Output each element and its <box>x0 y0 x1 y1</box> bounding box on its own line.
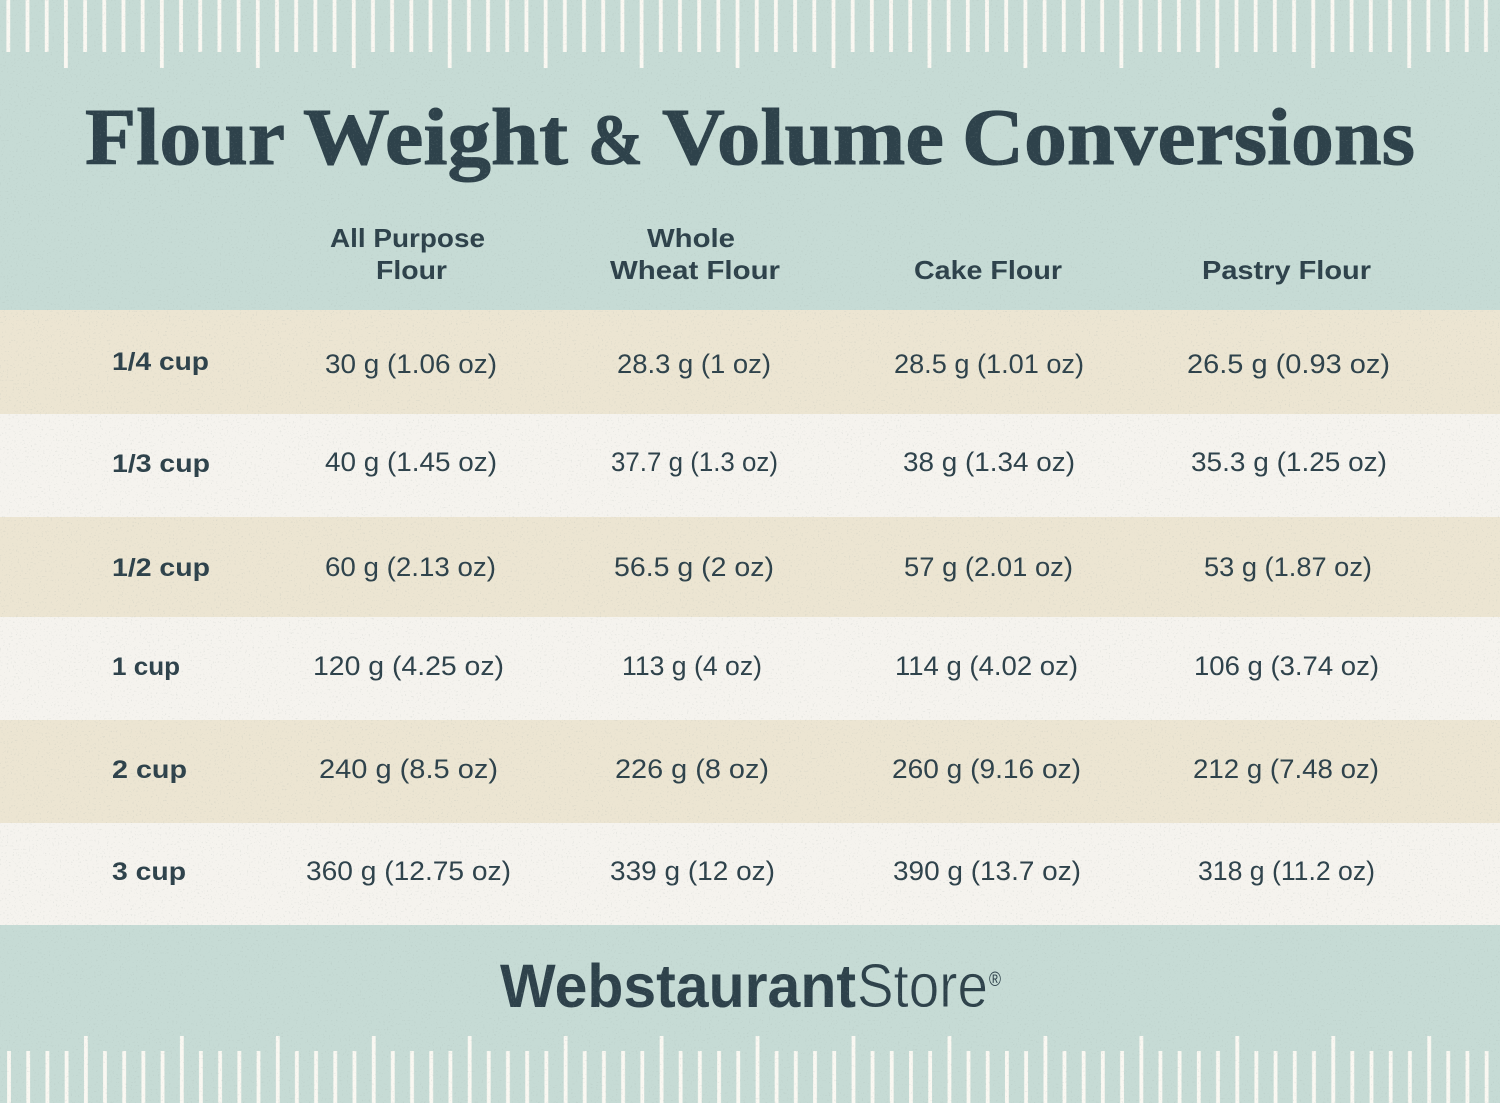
row: 1/3 cup: 1/3 cup <box>112 450 210 478</box>
row: 1/3 cup: 40 g (1.45 oz) <box>325 447 497 477</box>
row: 1/4 cup: 1/4 cup <box>112 348 209 376</box>
heading: Pastry Flour: Pastry Flour <box>1202 255 1371 285</box>
row: 1/4 cup: 28.5 g (1.01 oz) <box>894 349 1084 379</box>
row: 3 cup: 339 g (12 oz) <box>610 856 775 886</box>
column headings <box>330 223 1371 285</box>
row: 2 cup: 260 g (9.16 oz) <box>892 754 1081 784</box>
row: 2 cup: 212 g (7.48 oz) <box>1193 754 1379 784</box>
logo: WebstaurantStore: Webstaurant <box>500 952 856 1020</box>
row: 1/3 cup: 37.7 g (1.3 oz) <box>611 447 778 477</box>
row: 3 cup: 318 g (11.2 oz) <box>1198 856 1375 886</box>
row: 1 cup: 113 g (4 oz) <box>622 651 762 681</box>
heading: Cake Flour: Cake Flour <box>914 255 1062 285</box>
row: 1/4 cup <box>0 310 1500 414</box>
row: 1/3 cup <box>0 414 1500 517</box>
row: 3 cup: 390 g (13.7 oz) <box>893 856 1081 886</box>
row: 1 cup: 120 g (4.25 oz) <box>313 651 504 681</box>
row: 1/3 cup: 38 g (1.34 oz) <box>903 447 1075 477</box>
logo: WebstaurantStore: Store <box>857 952 988 1021</box>
heading: Whole Wheat Flour: Whole <box>647 223 735 253</box>
ruler ticks: bottom <box>0 1036 1500 1103</box>
row: 2 cup <box>0 720 1500 823</box>
row: 1/2 cup: 53 g (1.87 oz) <box>1204 552 1372 582</box>
heading: All Purpose Flour: Flour <box>376 255 447 285</box>
ruler ticks: top <box>0 0 1500 70</box>
title: Conversions <box>962 92 1415 182</box>
row: 1/2 cup: 56.5 g (2 oz) <box>614 552 774 582</box>
title <box>85 92 1415 182</box>
row: 1/4 cup: 30 g (1.06 oz) <box>325 349 497 379</box>
row: 1 cup: 106 g (3.74 oz) <box>1194 651 1379 681</box>
title: & <box>588 100 643 180</box>
row: 3 cup: 3 cup <box>112 858 186 886</box>
row: 1/2 cup: 60 g (2.13 oz) <box>325 552 496 582</box>
row: 1/2 cup: 1/2 cup <box>112 554 210 582</box>
title: Volume <box>662 92 944 182</box>
logo: WebstaurantStore: ® <box>989 969 1001 991</box>
title: Flour <box>85 92 285 182</box>
row: 3 cup: 360 g (12.75 oz) <box>306 856 511 886</box>
row: 1/2 cup <box>0 517 1500 617</box>
row: 1 cup: 1 cup <box>112 653 180 681</box>
row: 2 cup: 240 g (8.5 oz) <box>319 754 498 784</box>
row: 1 cup: 114 g (4.02 oz) <box>895 651 1078 681</box>
title: Weight <box>303 92 568 182</box>
heading: All Purpose Flour <box>330 223 485 285</box>
heading: All Purpose Flour: All Purpose <box>330 223 485 253</box>
row: 1/2 cup: 57 g (2.01 oz) <box>904 552 1073 582</box>
row: 3 cup <box>0 823 1500 925</box>
row: 1/3 cup: 35.3 g (1.25 oz) <box>1191 447 1387 477</box>
row: 1/4 cup: 28.3 g (1 oz) <box>617 349 771 379</box>
heading: Whole Wheat Flour: Wheat Flour <box>610 255 780 285</box>
row: 1 cup <box>0 617 1500 720</box>
heading: Whole Wheat Flour <box>610 223 780 285</box>
row: 2 cup: 2 cup <box>112 756 187 784</box>
row: 2 cup: 226 g (8 oz) <box>615 754 769 784</box>
row: 1/4 cup: 26.5 g (0.93 oz) <box>1187 349 1390 379</box>
